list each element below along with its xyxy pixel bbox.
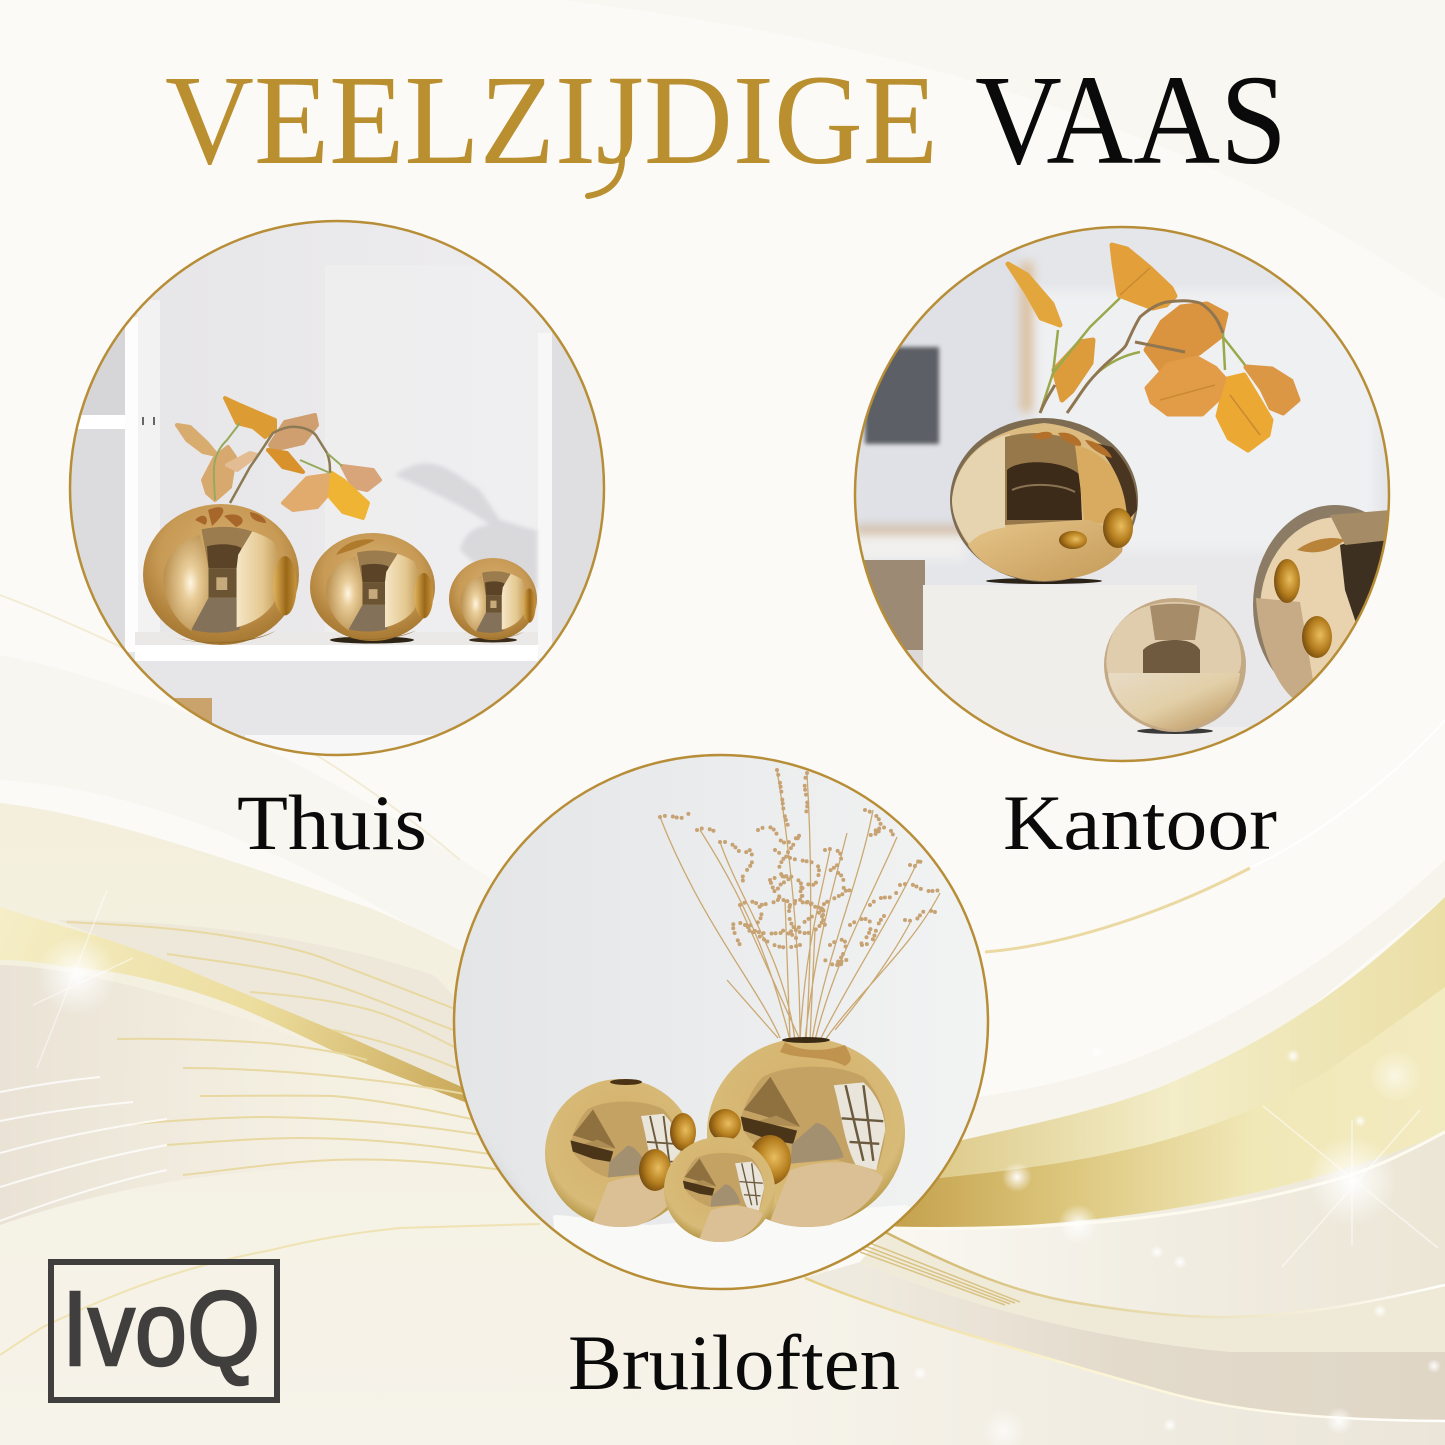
icon: main vase	[950, 418, 1138, 584]
title: VAAS	[975, 49, 1287, 191]
icon: left vase	[545, 1079, 696, 1227]
panel: bruiloften photo	[454, 755, 989, 1290]
icon: leafy branch	[1008, 245, 1298, 450]
icon: pale gold vase	[1104, 598, 1246, 734]
wave: gold lines	[67, 922, 520, 1175]
label: bruiloften: Bruiloften	[568, 1319, 900, 1406]
icon: leafy branch	[177, 398, 380, 527]
wave: bottom right pale band	[860, 1232, 1445, 1352]
sparkles	[33, 890, 1441, 1445]
wave: upper right shadow	[960, 860, 1445, 1140]
panel: thuis photo	[70, 221, 612, 761]
wave: right upper gold band	[895, 897, 1445, 1228]
label: thuis: Thuis	[237, 779, 427, 866]
icon: dried flowers	[660, 770, 940, 1040]
panel: kantoor photo	[855, 227, 1417, 767]
icon: small vase	[664, 1137, 775, 1242]
label: kantoor: Kantoor	[1003, 779, 1277, 866]
title: VEELZIJDIGE	[165, 49, 938, 191]
wave: white band under gold	[885, 1132, 1445, 1317]
wave: grey lens	[57, 920, 480, 1100]
icon: small vase	[449, 558, 537, 642]
title	[165, 49, 1287, 196]
wave: right lower gold band	[895, 987, 1445, 1228]
icon: medium vase	[310, 533, 435, 644]
wave: left gold ribbon	[0, 907, 480, 1108]
wave: left lower panel	[0, 965, 520, 1225]
icon: gold knobs	[709, 1109, 791, 1185]
icon: large vase	[707, 1037, 905, 1227]
logo: IvoQ: IvoQ	[62, 1270, 260, 1388]
wave: left cream band	[0, 803, 900, 1445]
icon: large vase	[143, 504, 299, 645]
wave: bottom right taupe	[805, 1262, 1445, 1421]
icon: clipped right vase	[1253, 505, 1388, 698]
wave: bottom right floor	[780, 1278, 1445, 1445]
